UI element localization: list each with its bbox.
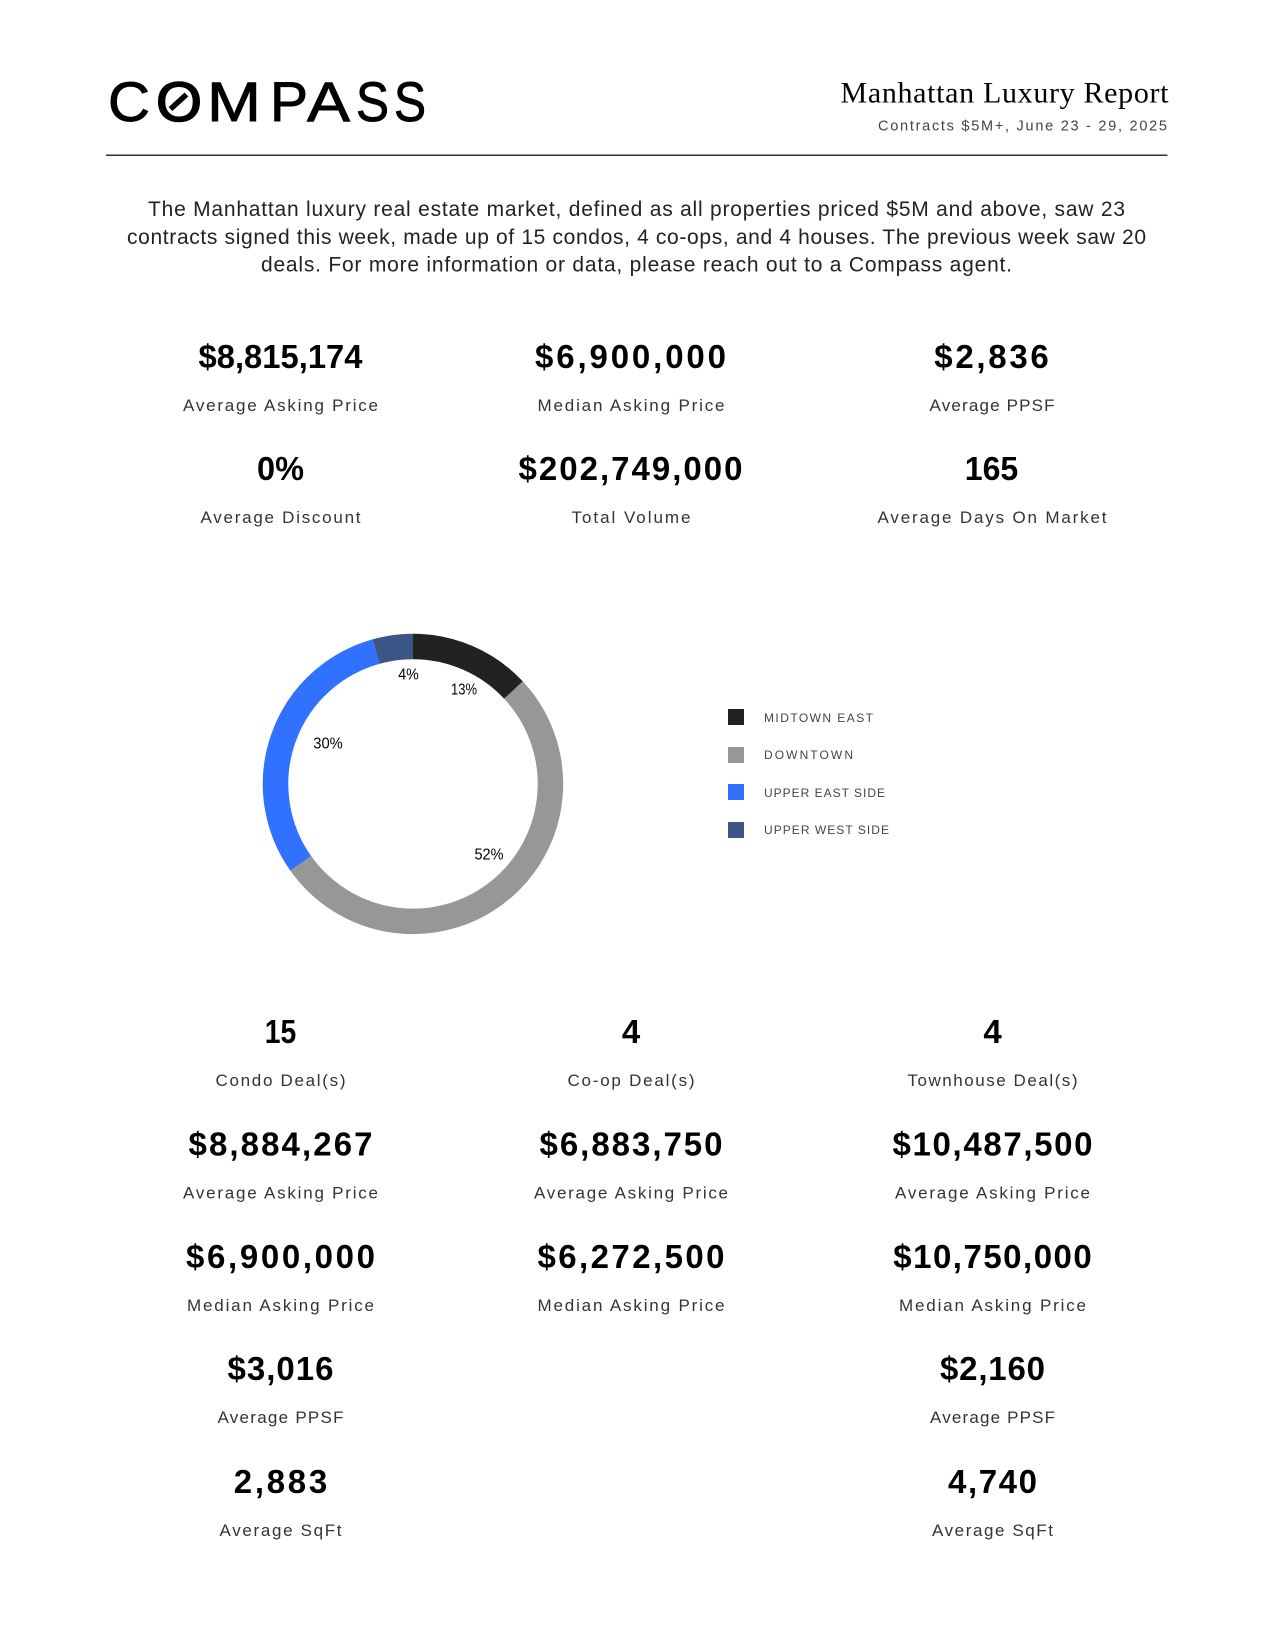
stat: average days on market: Average Days On Market — [878, 508, 1107, 527]
stat: townhouse median asking price: Median Asking Price — [899, 1296, 1086, 1315]
logo: Compass: O — [156, 70, 202, 133]
legend item: Upper East Side: UPPER EAST SIDE — [764, 786, 885, 800]
stat: townhouse average sqft: 4,740 — [948, 1463, 1037, 1500]
legend item: Upper West Side: UPPER WEST SIDE — [764, 823, 889, 837]
stat: condo deals — [216, 1013, 346, 1090]
donut chart: deals by neighborhood — [276, 646, 550, 921]
stat: townhouse average asking price: $10,487,500 — [892, 1126, 1092, 1162]
header — [108, 70, 1169, 134]
stat: condo median asking price — [186, 1238, 375, 1315]
intro paragraph: The Manhattan luxury real estate market, defined as all properties priced $5M and above, saw 23 — [148, 198, 1125, 221]
legend item: Upper West Side — [728, 822, 889, 838]
legend item: Midtown East: MIDTOWN EAST — [764, 711, 874, 725]
stat: condo median asking price: $6,900,000 — [186, 1238, 375, 1275]
report subtitle: Contracts $5M+, June 23 - 29, 2025 — [878, 118, 1167, 134]
stat: average PPSF — [930, 338, 1054, 415]
segment: Upper East Side — [276, 652, 376, 863]
percent labels: 52% — [474, 846, 504, 864]
stat: townhouse median asking price: $10,750,000 — [893, 1238, 1092, 1275]
stat: co-op average asking price: Average Asking Price — [534, 1184, 728, 1202]
stat: condo average PPSF: Average PPSF — [218, 1408, 344, 1427]
stat: townhouse average sqft: Average SqFt — [932, 1521, 1053, 1540]
stat: townhouse average PPSF: Average PPSF — [930, 1408, 1055, 1427]
percent labels: 13% — [451, 682, 477, 698]
logo: Compass: S — [394, 70, 426, 133]
stat: average discount: Average Discount — [200, 508, 361, 527]
stat: condo average sqft: 2,883 — [234, 1463, 327, 1500]
stat: condo average sqft — [220, 1463, 342, 1540]
stat: condo deals: 15 — [265, 1013, 296, 1050]
stat: condo average sqft: Average SqFt — [220, 1521, 342, 1540]
stat: townhouse average PPSF — [930, 1350, 1055, 1427]
stat: condo median asking price: Median Asking Price — [187, 1296, 374, 1315]
stat: co-op average asking price: $6,883,750 — [540, 1126, 722, 1162]
stat: townhouse deals: Townhouse Deal(s) — [908, 1071, 1078, 1090]
stat: townhouse average asking price: Average Asking Price — [895, 1184, 1090, 1202]
stat: average asking price — [183, 338, 378, 415]
stat: co-op deals: Co-op Deal(s) — [568, 1071, 694, 1090]
stat: co-op average asking price — [534, 1126, 728, 1202]
segment: Midtown East — [413, 646, 514, 690]
stat: total volume: Total Volume — [572, 508, 690, 527]
percent labels: 30% — [313, 736, 343, 752]
logo: Compass: A — [307, 70, 351, 133]
stat: median asking price — [535, 338, 726, 415]
legend item: Upper East Side — [728, 784, 885, 800]
stat: co-op median asking price — [538, 1238, 724, 1315]
legend item: Midtown East — [728, 709, 874, 725]
intro paragraph: contracts signed this week, made up of 15 condos, 4 co-ops, and 4 houses. The previous week saw 20 — [127, 226, 1146, 249]
stat: condo average PPSF — [218, 1350, 344, 1427]
stat: townhouse average PPSF: $2,160 — [940, 1350, 1045, 1387]
stat: townhouse median asking price — [893, 1238, 1092, 1315]
stat: average days on market: 165 — [965, 450, 1018, 487]
stat: townhouse deals — [908, 1013, 1078, 1090]
panel: townhouse column — [892, 1013, 1092, 1540]
legend — [728, 709, 889, 838]
intro paragraph: deals. For more information or data, please reach out to a Compass agent. — [261, 254, 1012, 276]
stat: co-op median asking price: $6,272,500 — [538, 1238, 724, 1275]
stat: average asking price: Average Asking Price — [183, 396, 378, 415]
stat: total volume: $202,749,000 — [518, 450, 742, 487]
stat: median asking price: Median Asking Price — [538, 396, 724, 415]
stat: co-op deals: 4 — [622, 1013, 641, 1050]
stat: average PPSF: Average PPSF — [930, 396, 1054, 415]
panel: co-op column — [534, 1013, 728, 1315]
panel: overall statistics — [183, 338, 1107, 527]
logo: Compass: M — [207, 70, 261, 133]
stat: average discount — [200, 450, 361, 527]
stat: townhouse average asking price — [892, 1126, 1092, 1202]
intro paragraph — [127, 198, 1146, 276]
stat: average discount: 0% — [257, 450, 304, 487]
stat: co-op median asking price: Median Asking Price — [538, 1296, 724, 1315]
report title: Manhattan Luxury Report — [840, 76, 1169, 110]
stat: total volume — [518, 450, 742, 527]
stat: condo average asking price: Average Asking Price — [183, 1184, 378, 1202]
legend item: Downtown — [728, 747, 853, 763]
stat: condo average asking price: $8,884,267 — [188, 1126, 372, 1162]
legend item: Downtown: DOWNTOWN — [764, 748, 853, 762]
segment: Upper West Side — [376, 646, 413, 652]
stat: average asking price: $8,815,174 — [198, 338, 363, 375]
logo: Compass: C — [108, 70, 150, 133]
segment: Downtown — [301, 690, 550, 921]
stat: average PPSF: $2,836 — [934, 338, 1049, 375]
stat: condo average asking price — [183, 1126, 378, 1202]
logo: Compass — [108, 70, 426, 133]
stat: townhouse deals: 4 — [983, 1013, 1002, 1050]
stat: townhouse average sqft — [932, 1463, 1053, 1540]
percent labels — [313, 666, 504, 864]
logo: Compass: S — [356, 70, 389, 133]
stat: median asking price: $6,900,000 — [535, 338, 726, 375]
percent labels: 4% — [398, 666, 419, 684]
stat: average days on market — [878, 450, 1107, 527]
stat: condo deals: Condo Deal(s) — [216, 1071, 346, 1090]
stat: condo average PPSF: $3,016 — [228, 1350, 334, 1387]
logo: Compass: P — [270, 70, 308, 133]
panel: condo column — [183, 1013, 378, 1540]
stat: co-op deals — [568, 1013, 694, 1090]
